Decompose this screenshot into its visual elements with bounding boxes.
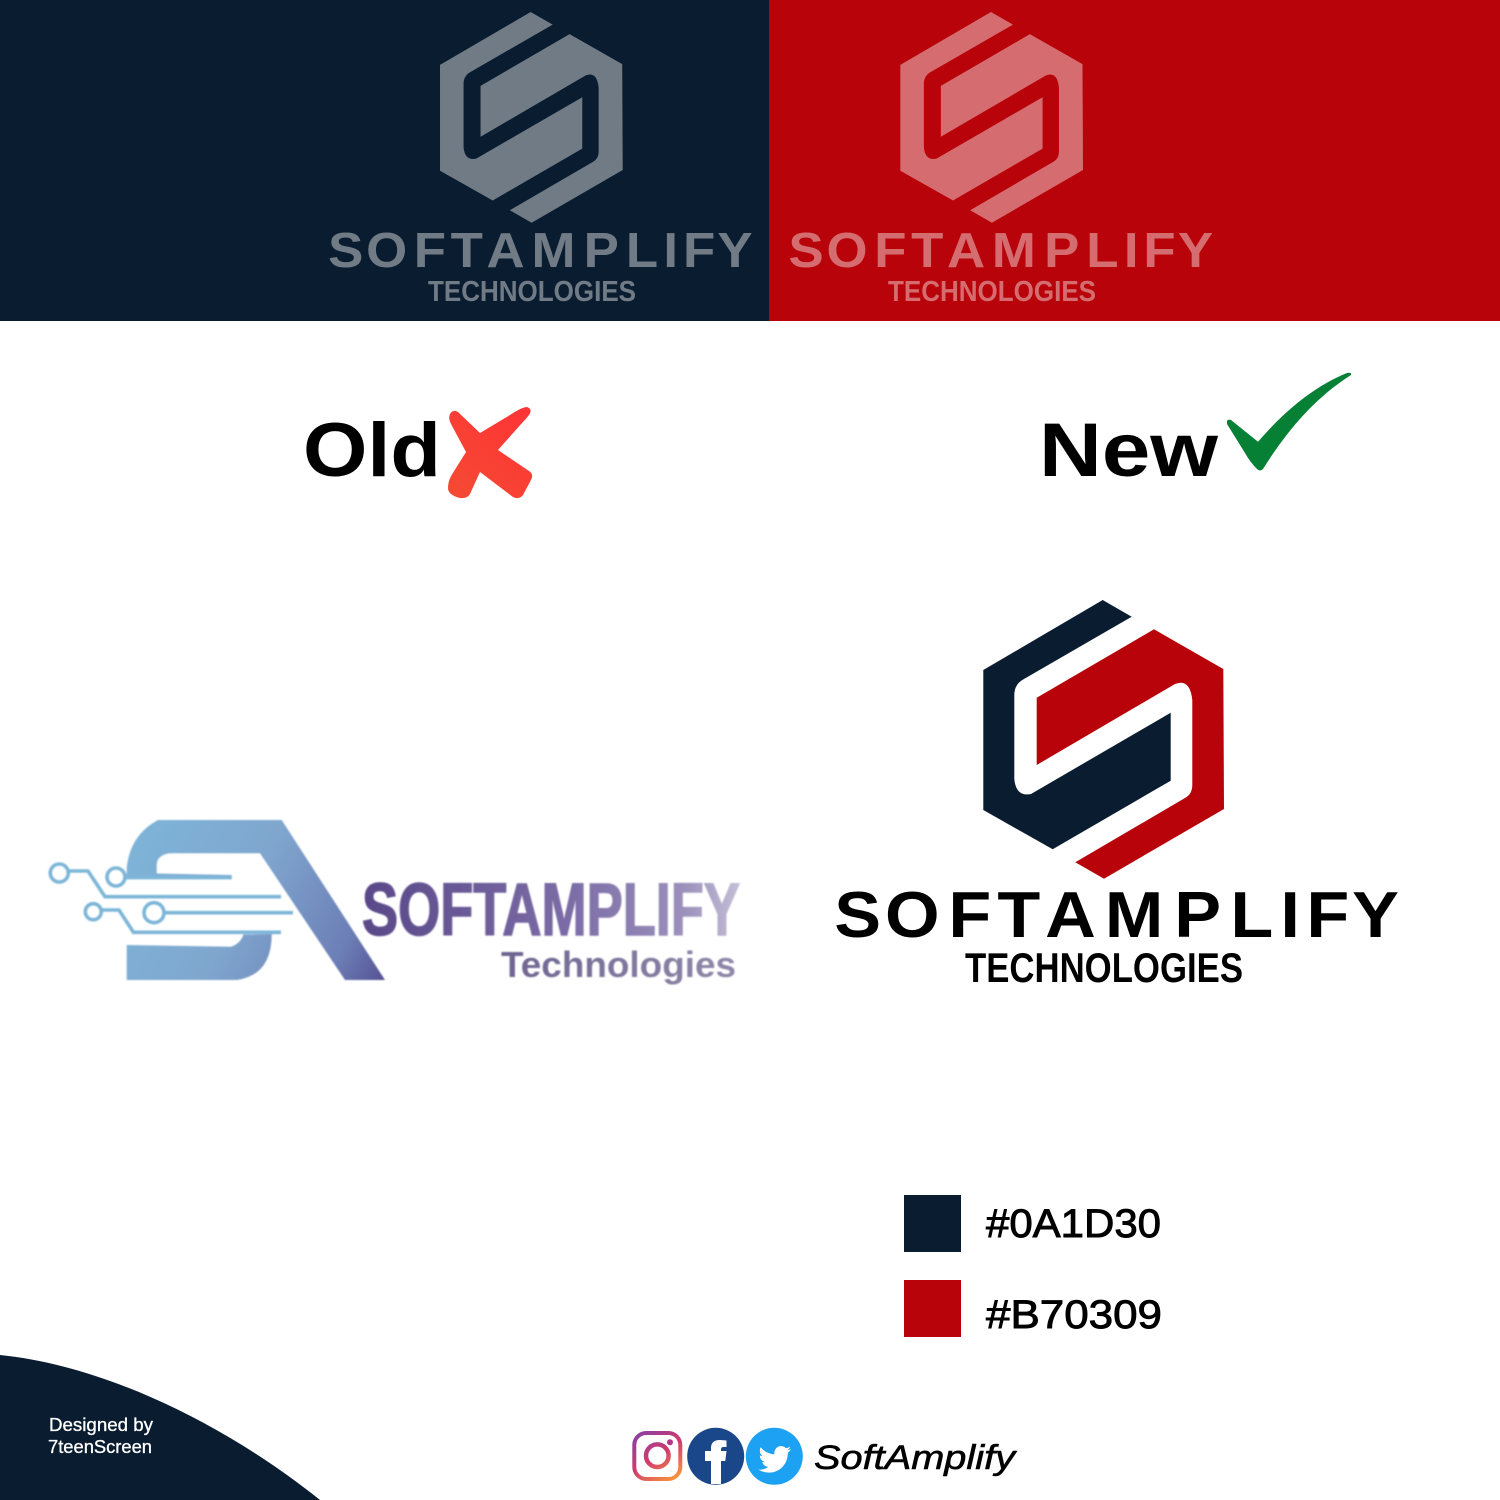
old logo: circuit lines [50, 864, 293, 932]
old logo: subtitle: Technologies [501, 944, 736, 985]
faded wordmark on navy: SOFTAMPLIFY [328, 223, 753, 278]
faded logo mark on navy [440, 12, 623, 223]
old logo: S and A mark [127, 820, 385, 980]
new logo [834, 600, 1399, 991]
faded subtitle on red: TECHNOLOGIES [888, 276, 1096, 308]
label: red hex: #B70309 [986, 1293, 1162, 1337]
new logo: subtitle: TECHNOLOGIES [965, 944, 1243, 991]
icon: facebook [687, 1428, 744, 1485]
icon: green check [1227, 373, 1351, 470]
new logo: wordmark: SOFTAMPLIFY [834, 879, 1399, 951]
icon: red cross [448, 407, 532, 498]
credit line two: 7teenScreen [48, 1437, 152, 1457]
old logo [50, 820, 740, 985]
palette [904, 1195, 1162, 1337]
icon: twitter [746, 1428, 803, 1485]
new logo: navy half of hexagon [983, 600, 1171, 849]
icon: instagram [634, 1433, 680, 1479]
panel: navy banner with faded logo [0, 0, 769, 321]
heading: New: New [1039, 408, 1219, 493]
heading: Old: Old [303, 408, 441, 493]
faded subtitle on navy: TECHNOLOGIES [428, 276, 636, 308]
swatch: red [904, 1280, 961, 1337]
faded wordmark on red: SOFTAMPLIFY [788, 223, 1213, 278]
credit line one: Designed by [49, 1415, 153, 1435]
old logo: wordmark: SOFTAMPLIFY [362, 868, 740, 951]
new logo: red half of hexagon [1037, 629, 1224, 879]
handle text: SoftAmplify [814, 1439, 1017, 1477]
faded logo mark on red [900, 12, 1083, 223]
swatch: navy [904, 1195, 961, 1252]
social handles [634, 1428, 1017, 1485]
footer corner with credit [0, 1355, 320, 1500]
panel: red banner with faded logo [769, 0, 1500, 321]
label: navy hex: #0A1D30 [986, 1202, 1161, 1246]
